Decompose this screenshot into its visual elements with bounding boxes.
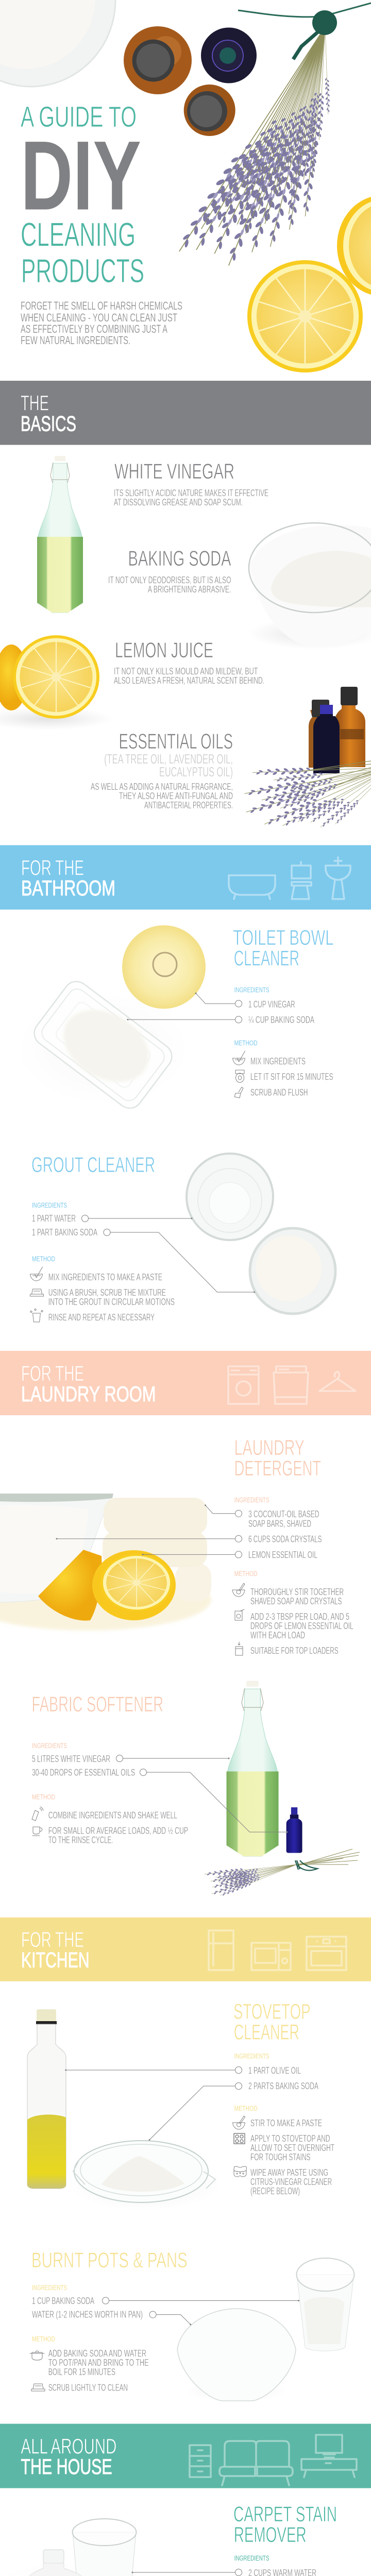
photo: baking soda in dish bbox=[15, 976, 191, 1113]
ingredients bbox=[56, 1496, 322, 1560]
section band: laundry room bbox=[0, 1351, 371, 1415]
description: ALSO LEAVES A FRESH, NATURAL SCENT BEHIND. bbox=[114, 675, 264, 686]
subheading: oil types bbox=[104, 751, 233, 779]
method: FOR SMALL OR AVERAGE LOADS, ADD ½ CUP bbox=[48, 1826, 188, 1836]
heading: STOVETOP bbox=[233, 1999, 310, 2024]
title line: products: PRODUCTS bbox=[21, 252, 144, 290]
intro text: AS EFFECTIVELY BY COMBINING JUST A bbox=[21, 323, 167, 335]
ingredients: INGREDIENTS bbox=[234, 1496, 269, 1504]
section band: kitchen: KITCHEN bbox=[21, 1948, 90, 1972]
method: (RECIPE BELOW) bbox=[250, 2186, 300, 2196]
ingredients bbox=[65, 2053, 318, 2141]
method bbox=[233, 2105, 334, 2196]
heading bbox=[233, 925, 334, 970]
ingredients: 1 PART WATER bbox=[32, 1213, 76, 1224]
title bbox=[21, 100, 144, 290]
method bbox=[232, 1570, 353, 1656]
description: IT NOT ONLY KILLS MOULD AND MILDEW, BUT bbox=[114, 666, 258, 676]
ingredients: 1 PART BAKING SODA bbox=[32, 1227, 97, 1238]
subheading: oil types: (TEA TREE OIL, LAVENDER OIL, bbox=[104, 751, 233, 767]
panel: stovetop cleaner bbox=[27, 1999, 334, 2210]
panel: burnt pots and pans bbox=[30, 2248, 355, 2402]
hero: ingredient photos bbox=[0, 0, 371, 372]
heading: BAKING SODA bbox=[128, 546, 231, 570]
section band: the basics: THE bbox=[21, 391, 49, 415]
photo: soda crystals, soap bars and lemons bbox=[0, 1494, 211, 1631]
heading: REMOVER bbox=[234, 2522, 307, 2547]
method: RINSE AND REPEAT AS NECESSARY bbox=[48, 1312, 155, 1323]
ingredients: 30-40 DROPS OF ESSENTIAL OILS bbox=[32, 1768, 135, 1778]
method: SCRUB LIGHTLY TO CLEAN bbox=[48, 2382, 128, 2393]
section band: all around the house: THE HOUSE bbox=[21, 2454, 112, 2479]
ingredients: 6 CUPS SODA CRYSTALS bbox=[248, 1534, 322, 1545]
panel: toilet bowl cleaner bbox=[15, 925, 334, 1113]
section band: kitchen: FOR THE bbox=[21, 1927, 84, 1952]
photo: lemon bbox=[0, 635, 113, 730]
ingredients: INGREDIENTS bbox=[32, 2284, 67, 2292]
ingredients bbox=[127, 986, 314, 1025]
method: TO THE RINSE CYCLE. bbox=[48, 1835, 113, 1845]
method: BOIL FOR 15 MINUTES bbox=[48, 2367, 115, 2377]
method: COMBINE INGREDIENTS AND SHAKE WELL bbox=[48, 1810, 177, 1821]
panel: laundry detergent bbox=[0, 1435, 353, 1656]
method: METHOD bbox=[32, 1793, 55, 1801]
ingredients: INGREDIENTS bbox=[234, 2554, 269, 2562]
panel: fabric softener bbox=[32, 1681, 360, 1897]
section band: all around the house: ALL AROUND bbox=[21, 2434, 116, 2458]
heading: LEMON JUICE bbox=[115, 638, 213, 662]
photo: glass of baking soda bbox=[297, 2258, 355, 2351]
panel: lemon juice bbox=[0, 635, 264, 730]
photo: empty glass bowl bbox=[177, 2309, 296, 2402]
section band: laundry room: FOR THE bbox=[21, 1361, 84, 1385]
intro text bbox=[21, 299, 182, 347]
heading bbox=[233, 2502, 337, 2547]
method bbox=[30, 1255, 175, 1323]
photo: bottles and lavender bbox=[244, 687, 371, 829]
method bbox=[30, 2335, 148, 2393]
method: TO POT/PAN AND BRING TO THE bbox=[48, 2358, 148, 2368]
icon: drawers bbox=[190, 2445, 211, 2477]
subheading: oil types: EUCALYPTUS OIL) bbox=[159, 764, 233, 779]
ingredients bbox=[86, 2554, 316, 2576]
photo: bowl of baking soda from above bbox=[0, 0, 115, 87]
icon: sink bbox=[326, 857, 350, 899]
photo: glass of water bbox=[187, 1154, 273, 1240]
heading: GROUT CLEANER bbox=[31, 1153, 155, 1177]
icon: washing machine bbox=[228, 1366, 259, 1404]
icon: toilet bbox=[292, 862, 311, 899]
heading bbox=[234, 1435, 321, 1480]
method: METHOD bbox=[234, 1039, 258, 1047]
section band: the basics bbox=[0, 381, 371, 445]
icon: sofa bbox=[220, 2441, 293, 2485]
ingredients: 1 PART OLIVE OIL bbox=[248, 2065, 301, 2076]
description: IT NOT ONLY DEODORISES, BUT IS ALSO bbox=[108, 575, 231, 585]
panel: white vinegar bbox=[37, 456, 268, 613]
heading: WHITE VINEGAR bbox=[114, 459, 234, 483]
description: AT DISSOLVING GREASE AND SOAP SCUM. bbox=[114, 497, 243, 507]
method: INTO THE GROUT IN CIRCULAR MOTIONS bbox=[48, 1297, 175, 1307]
panel: essential oils bbox=[91, 687, 371, 829]
icon: microwave bbox=[251, 1943, 291, 1970]
icon: top loader bbox=[274, 1366, 308, 1404]
heading: BURNT POTS & PANS bbox=[31, 2248, 188, 2272]
section band: bathroom: FOR THE bbox=[21, 855, 84, 880]
description bbox=[114, 666, 264, 686]
intro text: WHEN CLEANING - YOU CAN CLEAN JUST bbox=[21, 311, 177, 324]
section band: the basics: BASICS bbox=[21, 411, 76, 436]
icon: fridge bbox=[209, 1930, 233, 1970]
section band: all around the house bbox=[0, 2424, 371, 2488]
method bbox=[233, 1039, 333, 1098]
method: LET IT SIT FOR 15 MINUTES bbox=[250, 1072, 333, 1082]
ingredients: INGREDIENTS bbox=[32, 1742, 67, 1750]
description bbox=[91, 782, 233, 810]
ingredients: 5 LITRES WHITE VINEGAR bbox=[32, 1754, 110, 1764]
title line: cleaning: CLEANING bbox=[21, 215, 136, 253]
section band: kitchen bbox=[0, 1918, 371, 1981]
panel: grout cleaner bbox=[30, 1153, 335, 1323]
photo: bowl of baking soda bbox=[247, 523, 371, 649]
icon: tv unit bbox=[301, 2435, 357, 2477]
photo: vinegar bottle from above bbox=[122, 925, 206, 1009]
photo: small amber bottle from above bbox=[184, 84, 235, 136]
ingredients: 3 COCONUT-OIL BASED bbox=[248, 1509, 319, 1519]
heading: LAUNDRY bbox=[234, 1435, 305, 1460]
method: METHOD bbox=[234, 2105, 258, 2112]
ingredients: 1 CUP VINEGAR bbox=[248, 999, 295, 1010]
method: ADD BAKING SODA AND WATER bbox=[48, 2348, 146, 2359]
panel: carpet stain remover bbox=[0, 2502, 346, 2576]
method: SCRUB AND FLUSH bbox=[250, 1087, 308, 1097]
method: APPLY TO STOVETOP AND bbox=[250, 2133, 330, 2144]
method: STIR TO MAKE A PASTE bbox=[250, 2118, 322, 2128]
description: AS WELL AS ADDING A NATURAL FRAGRANCE, bbox=[91, 782, 233, 792]
ingredients: WATER (1-2 INCHES WORTH IN PAN) bbox=[32, 2310, 143, 2320]
heading: FABRIC SOFTENER bbox=[32, 1692, 163, 1716]
photo: amber bottle from above bbox=[124, 26, 192, 94]
icon: bathtub bbox=[229, 875, 275, 899]
method bbox=[32, 1793, 188, 1845]
section band: laundry room: LAUNDRY ROOM bbox=[21, 1382, 156, 1406]
section band: bathroom bbox=[0, 845, 371, 910]
ingredients bbox=[32, 2284, 299, 2325]
description: ANTIBACTERIAL PROPERTIES. bbox=[144, 800, 233, 810]
icon: oven bbox=[307, 1937, 346, 1970]
title line: A guide to: A GUIDE TO bbox=[21, 100, 137, 133]
ingredients: INGREDIENTS bbox=[234, 2053, 269, 2060]
ingredients: INGREDIENTS bbox=[234, 986, 269, 994]
ingredients: 1 CUP BAKING SODA bbox=[32, 2296, 94, 2306]
photo: lemon half right bbox=[337, 195, 371, 296]
method: FOR TOUGH STAINS bbox=[250, 2152, 310, 2162]
photo: olive oil bottle bbox=[27, 2009, 66, 2189]
description bbox=[108, 575, 231, 595]
intro text: FEW NATURAL INGREDIENTS. bbox=[21, 334, 130, 347]
method: METHOD bbox=[234, 1570, 258, 1578]
ingredients: INGREDIENTS bbox=[32, 1201, 67, 1209]
title line: DIY: DIY bbox=[21, 121, 141, 231]
ingredients bbox=[32, 1742, 288, 1833]
photo: vinegar bottle bbox=[37, 456, 83, 613]
photo: vinegar bottle, water glass and dish bbox=[0, 2519, 224, 2576]
heading: DETERGENT bbox=[234, 1456, 321, 1480]
heading bbox=[233, 1999, 310, 2044]
description: THEY ALSO HAVE ANTI-FUNGAL AND bbox=[119, 791, 233, 801]
method: USING A BRUSH, SCRUB THE MIXTURE bbox=[48, 1287, 166, 1298]
heading: CLEANER bbox=[234, 946, 299, 970]
ingredients bbox=[32, 1201, 255, 1293]
photo: vinegar bottle, dropper bottle and lavender bbox=[204, 1681, 360, 1897]
panel: baking soda bbox=[108, 523, 371, 649]
ingredients: SOAP BARS, SHAVED bbox=[248, 1519, 311, 1529]
section band: bathroom: BATHROOM bbox=[21, 876, 115, 900]
method: MIX INGREDIENTS bbox=[250, 1056, 306, 1066]
method: METHOD bbox=[32, 2335, 55, 2343]
icon: hanger bbox=[319, 1372, 356, 1391]
photo: glass of baking soda bbox=[250, 1228, 335, 1314]
ingredients: LEMON ESSENTIAL OIL bbox=[248, 1550, 317, 1560]
photo: lemon half bottom bbox=[247, 260, 363, 372]
heading: ESSENTIAL OILS bbox=[119, 729, 233, 753]
method: WIPE AWAY PASTE USING bbox=[250, 2167, 328, 2178]
photo: blue bottle from above bbox=[201, 28, 257, 83]
method: MIX INGREDIENTS TO MAKE A PASTE bbox=[48, 1272, 162, 1282]
photo: lavender bunch bbox=[173, 23, 332, 268]
method: WITH EACH LOAD bbox=[250, 1630, 305, 1640]
description: ITS SLIGHTLY ACIDIC NATURE MAKES IT EFFECTIVE bbox=[114, 488, 268, 498]
ingredients: ¼ CUP BAKING SODA bbox=[248, 1015, 314, 1025]
ingredients: 2 PARTS BAKING SODA bbox=[248, 2081, 318, 2091]
description bbox=[114, 488, 268, 507]
photo: green twine knot bbox=[238, 3, 371, 59]
intro text: FORGET THE SMELL OF HARSH CHEMICALS bbox=[21, 299, 182, 312]
photo: baking soda in glass dish bbox=[67, 2141, 222, 2210]
heading: CLEANER bbox=[234, 2020, 299, 2044]
description: A BRIGHTENING ABRASIVE. bbox=[148, 584, 231, 595]
method: METHOD bbox=[32, 1255, 55, 1263]
